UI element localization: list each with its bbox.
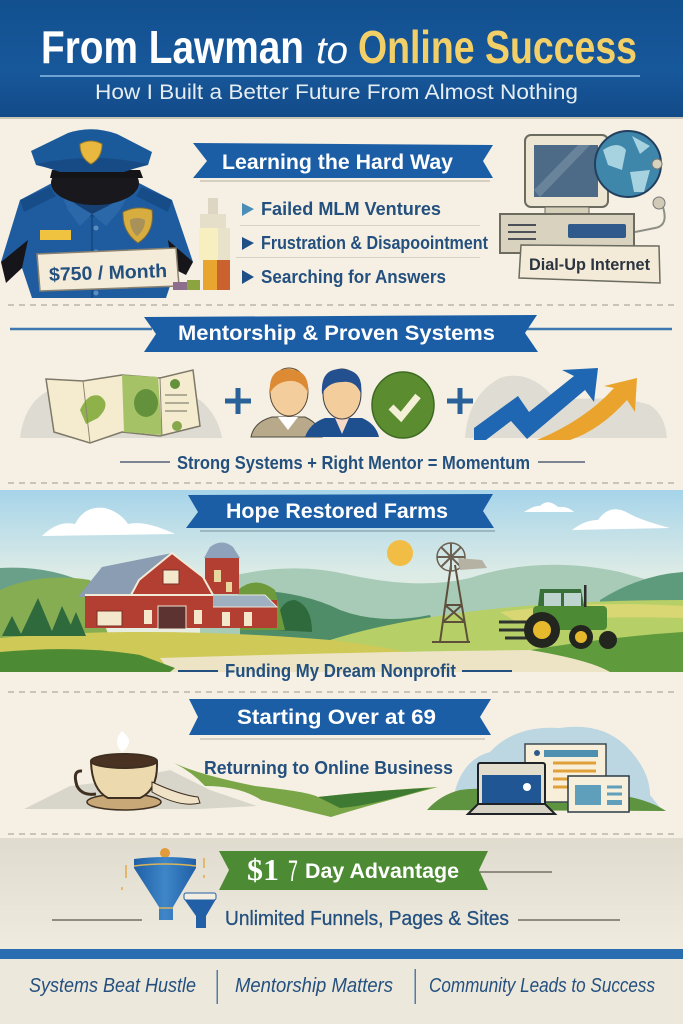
label: dial-up internet: Dial-Up Internet xyxy=(529,255,650,274)
caption: funding nonprofit: Funding My Dream Nonprofit xyxy=(225,661,456,681)
panel: hope restored farms xyxy=(0,490,683,681)
bar chart xyxy=(173,198,230,290)
label: salary xyxy=(37,248,179,291)
takeaway: Mentorship Matters xyxy=(235,975,393,997)
label: dial-up internet xyxy=(519,245,660,283)
title: From Lawman xyxy=(41,21,304,73)
icon: computer and globe xyxy=(500,131,665,283)
panel: learning the hard way xyxy=(1,129,665,298)
panel: $1 7 day advantage xyxy=(0,838,683,950)
icon: mentor and mentee xyxy=(251,368,379,437)
icon: funnels xyxy=(122,848,216,928)
banner: hope restored farms: Hope Restored Farms xyxy=(226,500,448,523)
icon: police uniform xyxy=(1,129,193,298)
icon: map xyxy=(20,370,222,443)
caption: momentum: Strong Systems + Right Mentor = Momentum xyxy=(177,453,530,473)
banner: $1 7 day advantage xyxy=(219,851,488,890)
panel: mentorship and proven systems xyxy=(10,315,672,473)
road and hedge xyxy=(0,649,610,672)
footer xyxy=(0,959,683,1024)
icon: website devices xyxy=(427,727,666,814)
banner: learning the hard way xyxy=(193,143,493,182)
illustration: green path xyxy=(174,763,438,817)
banner: learning the hard way: Learning the Hard Way xyxy=(222,151,453,174)
sun xyxy=(387,540,413,566)
icon: plus xyxy=(225,388,251,414)
banner: mentorship xyxy=(144,315,538,352)
title xyxy=(41,21,637,73)
banner: mentorship: Mentorship & Proven Systems xyxy=(178,322,495,345)
icon: windmill xyxy=(432,543,487,643)
bullet list: Searching for Answers xyxy=(261,267,446,287)
icon: growth arrows xyxy=(465,368,667,440)
bullet list xyxy=(236,199,488,287)
banner: starting over: Starting Over at 69 xyxy=(237,706,436,729)
bullet list: Frustration & Disapoointment xyxy=(261,233,488,253)
blue divider bar xyxy=(0,949,683,959)
panel: starting over at 69 xyxy=(24,699,666,817)
text: unlimited funnels: Unlimited Funnels, Pages & Sites xyxy=(225,908,509,930)
subtitle: How I Built a Better Future From Almost Nothing xyxy=(95,81,578,104)
bullet list: Failed MLM Ventures xyxy=(261,199,441,219)
title: to xyxy=(316,30,348,72)
header band xyxy=(0,0,683,119)
icon: coffee cup xyxy=(24,731,257,810)
trees xyxy=(2,582,312,636)
takeaway: Systems Beat Hustle xyxy=(29,975,196,997)
banner: starting over xyxy=(189,699,491,740)
icon: plus xyxy=(447,388,473,414)
illustration: red barn xyxy=(78,542,277,629)
hills xyxy=(0,565,683,672)
banner: $1 7 day advantage: 7 xyxy=(288,855,298,888)
clouds xyxy=(42,502,670,536)
banner: $1 7 day advantage: Day Advantage xyxy=(305,860,459,883)
icon: tractor xyxy=(499,585,617,649)
banner: $1 7 day advantage: $1 xyxy=(247,852,279,887)
icon: green check xyxy=(372,372,434,438)
text: returning to online business: Returning to Online Business xyxy=(204,758,453,778)
banner: hope restored farms xyxy=(186,494,495,532)
label: salary: $750 / Month xyxy=(49,261,167,286)
